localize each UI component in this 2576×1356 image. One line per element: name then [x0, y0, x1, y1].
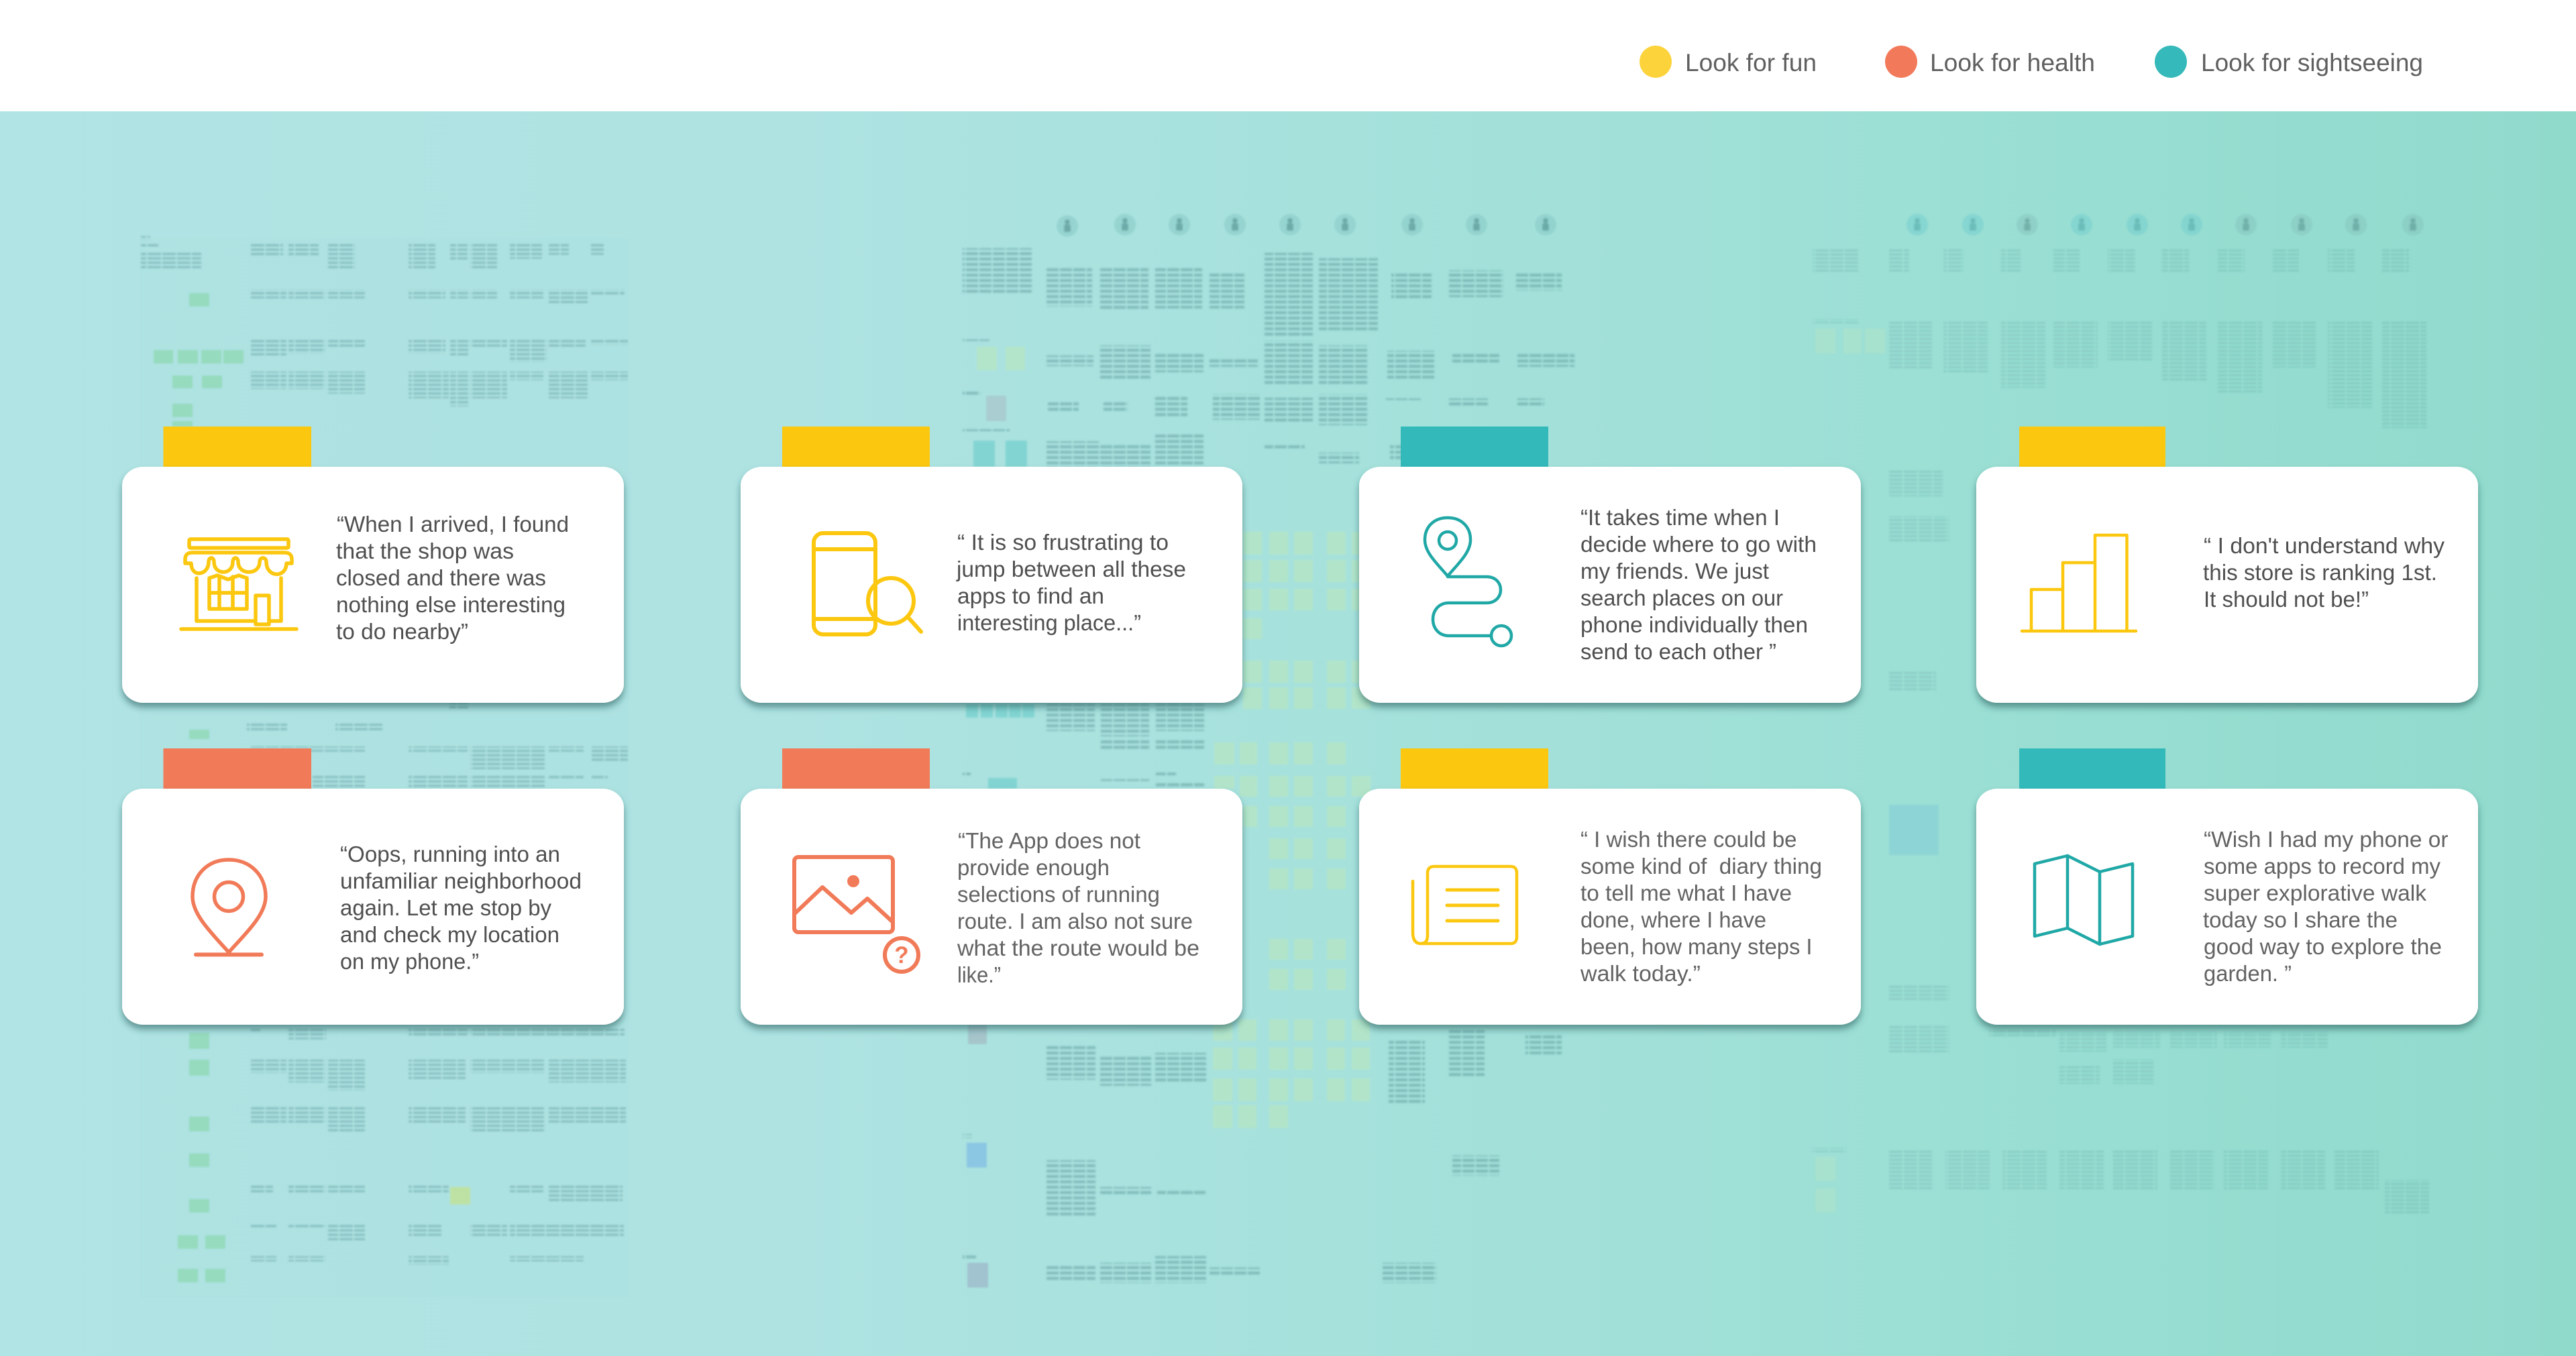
quote text: phone individually then	[1580, 612, 1808, 637]
quote text: some apps to record my	[2204, 854, 2440, 879]
quote text: send to each other ”	[1580, 639, 1776, 664]
quote text: my friends. We just	[1580, 559, 1769, 583]
card: record explorative walk quote	[1976, 748, 2478, 1025]
quote text: provide enough	[957, 855, 1110, 880]
quote text: to tell me what I have	[1580, 881, 1792, 905]
quote text: good way to explore the	[2204, 934, 2442, 959]
quote text: on my phone.”	[340, 949, 479, 974]
icon: image with question mark	[794, 857, 918, 972]
quote text: and check my location	[340, 922, 559, 947]
card: shop closed quote	[122, 427, 624, 703]
category tab	[782, 427, 930, 473]
card: deciding where to go quote	[1359, 427, 1861, 703]
card body	[1976, 789, 2478, 1025]
legend item: look for fun	[1640, 46, 1817, 78]
quote text: to do nearby”	[336, 619, 468, 644]
quote text: done, where I have	[1580, 907, 1766, 932]
quote text: that the shop was	[336, 539, 514, 563]
icon: route with pin	[1425, 518, 1511, 646]
category tab	[164, 748, 311, 795]
quote text: garden. ”	[2204, 961, 2292, 986]
icon: bar chart	[2022, 535, 2136, 631]
quote text: “Wish I had my phone or	[2204, 827, 2449, 852]
card body	[122, 467, 624, 703]
quote text: unfamiliar neighborhood	[340, 868, 582, 893]
card body	[1359, 789, 1861, 1025]
faded research table: middle document	[963, 214, 1574, 1288]
quote text: closed and there was	[336, 565, 546, 590]
card: store ranking quote	[1976, 427, 2478, 703]
middle document sticky notes	[1213, 532, 1371, 1128]
icon: location pin	[193, 860, 266, 955]
quote text: “The App does not	[958, 828, 1140, 853]
quote text: again. Let me stop by	[340, 895, 551, 920]
quote text: route. I am also not sure	[957, 909, 1193, 934]
card: jumping between apps quote	[741, 427, 1242, 703]
quote text	[2203, 827, 2449, 986]
legend item: look for fun: Look for fun	[1685, 49, 1817, 76]
legend item: look for sightseeing: Look for sightseeing	[2201, 49, 2423, 76]
quote text: selections of running	[957, 882, 1160, 907]
quote text	[956, 530, 1186, 635]
quote text: nothing else interesting	[336, 592, 566, 617]
legend item: look for health	[1885, 46, 2095, 78]
quote text: “ I don't understand why	[2204, 533, 2445, 558]
card body	[1976, 467, 2478, 703]
quote text: “ It is so frustrating to	[957, 530, 1169, 555]
quote text: walk today.”	[1580, 961, 1701, 986]
quote text	[1580, 505, 1817, 664]
card: running route quote	[741, 748, 1242, 1025]
quote text: “It takes time when I	[1580, 505, 1780, 530]
quote text	[340, 842, 582, 974]
quote text: super explorative walk	[2204, 881, 2426, 905]
category tab	[2019, 427, 2165, 473]
card body	[741, 467, 1242, 703]
middle document avatars	[1057, 214, 1556, 237]
quote text	[2203, 533, 2445, 612]
quote text: “When I arrived, I found	[337, 512, 569, 536]
quote text	[1580, 827, 1822, 986]
quote text: apps to find an	[957, 583, 1104, 608]
icon: folded map	[2035, 856, 2133, 944]
legend item: look for health: Look for health	[1930, 49, 2095, 76]
category tab	[1401, 748, 1548, 795]
card body	[1359, 467, 1861, 703]
quote text: “ I wish there could be	[1580, 827, 1796, 852]
card: diary quote	[1359, 748, 1861, 1025]
right document avatars	[1907, 214, 2424, 235]
quote text: decide where to go with	[1580, 532, 1817, 557]
quote text: what the route would be	[957, 936, 1199, 960]
icon: phone with magnifier	[814, 533, 921, 634]
quote text: like.”	[957, 962, 1001, 987]
legend	[1640, 46, 2423, 78]
quote text: interesting place...”	[957, 610, 1141, 635]
category tab	[2019, 748, 2165, 795]
header band	[0, 0, 2576, 111]
quote text: jump between all these	[956, 557, 1186, 581]
quote text	[957, 828, 1199, 987]
icon: document	[1413, 866, 1517, 944]
quote text: search places on our	[1580, 585, 1783, 610]
card body	[122, 789, 624, 1025]
category tab	[164, 427, 311, 473]
quote text: “Oops, running into an	[340, 842, 560, 866]
card: unfamiliar neighborhood quote	[122, 748, 624, 1025]
faded research table: left document	[140, 236, 629, 1298]
quote text: this store is ranking 1st.	[2203, 560, 2437, 585]
category tab	[782, 748, 930, 795]
quote text: It should not be!”	[2204, 587, 2369, 612]
quote text: some kind of diary thing	[1580, 854, 1822, 879]
card body	[741, 789, 1242, 1025]
icon: storefront	[181, 539, 297, 629]
icon: image with question mark: ?	[894, 942, 909, 968]
quote text: been, how many steps I	[1580, 934, 1813, 959]
faded research table: right document	[1813, 214, 2429, 1214]
quote text	[336, 512, 569, 644]
category tab	[1401, 427, 1548, 473]
quote text: today so I share the	[2203, 907, 2398, 932]
